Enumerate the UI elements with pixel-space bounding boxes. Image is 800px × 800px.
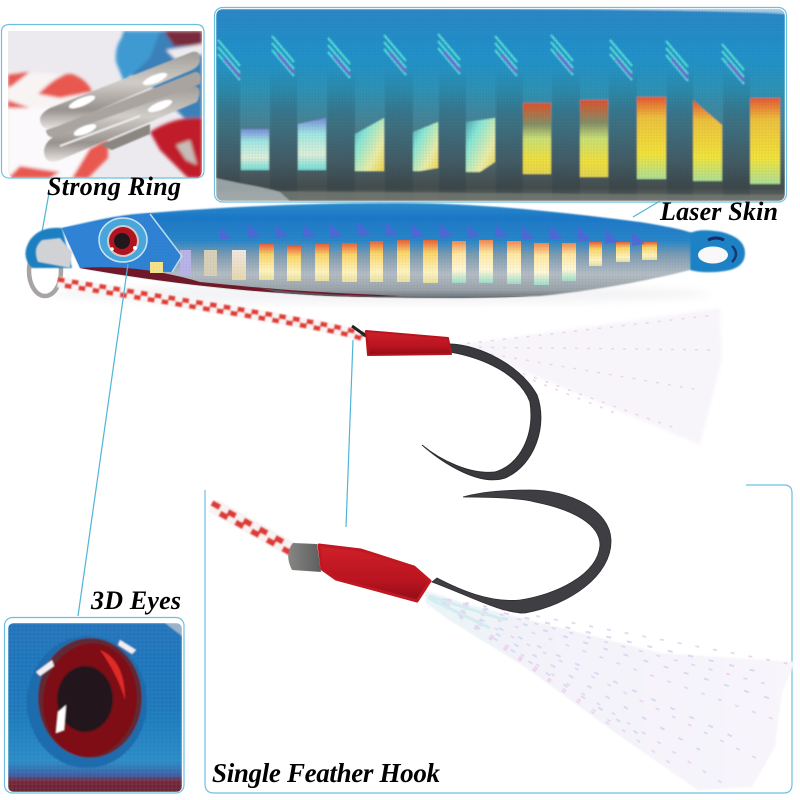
leader line: 3D eyes xyxy=(78,264,128,616)
label: Single Feather Hook: Single Feather Hook xyxy=(212,758,440,788)
braided line xyxy=(212,503,296,556)
feather xyxy=(424,590,795,790)
head seam xyxy=(150,214,182,272)
panel: strong ring close-up xyxy=(2,24,204,178)
highlight xyxy=(56,705,66,733)
sleeve xyxy=(288,543,321,572)
panel: single feather hook close-up xyxy=(205,485,795,793)
leader line: strong ring xyxy=(42,193,49,232)
leader line: single feather hook xyxy=(346,340,353,527)
upper hook xyxy=(352,326,541,480)
braided assist line xyxy=(58,280,365,340)
label: Strong Ring: Strong Ring xyxy=(47,172,181,201)
holographic bars xyxy=(241,97,780,184)
nose opening xyxy=(36,238,72,268)
panel frame xyxy=(205,485,792,793)
tail eyelet xyxy=(690,230,745,272)
eye rim xyxy=(38,638,142,758)
panel: 3D eye close-up xyxy=(4,618,184,793)
eye socket xyxy=(27,636,147,768)
split ring coils xyxy=(40,52,201,162)
label: Laser Skin: Laser Skin xyxy=(659,197,778,226)
body details xyxy=(62,205,700,302)
iris xyxy=(42,642,138,758)
blue lure nose behind ring xyxy=(120,31,202,121)
main body xyxy=(62,203,692,298)
thread wrap xyxy=(319,545,430,601)
red and white braid xyxy=(8,72,92,110)
icon: split ring on nose xyxy=(29,246,61,296)
hook xyxy=(432,490,611,613)
upper feather xyxy=(450,308,722,445)
icon: 3D eye on lure xyxy=(99,218,147,262)
nose loop xyxy=(25,228,72,268)
leader line: laser skin xyxy=(633,201,660,217)
pupil xyxy=(57,666,113,732)
panel: laser skin close-up xyxy=(214,8,786,202)
lure body xyxy=(25,203,745,304)
label: 3D Eyes: 3D Eyes xyxy=(90,586,181,615)
